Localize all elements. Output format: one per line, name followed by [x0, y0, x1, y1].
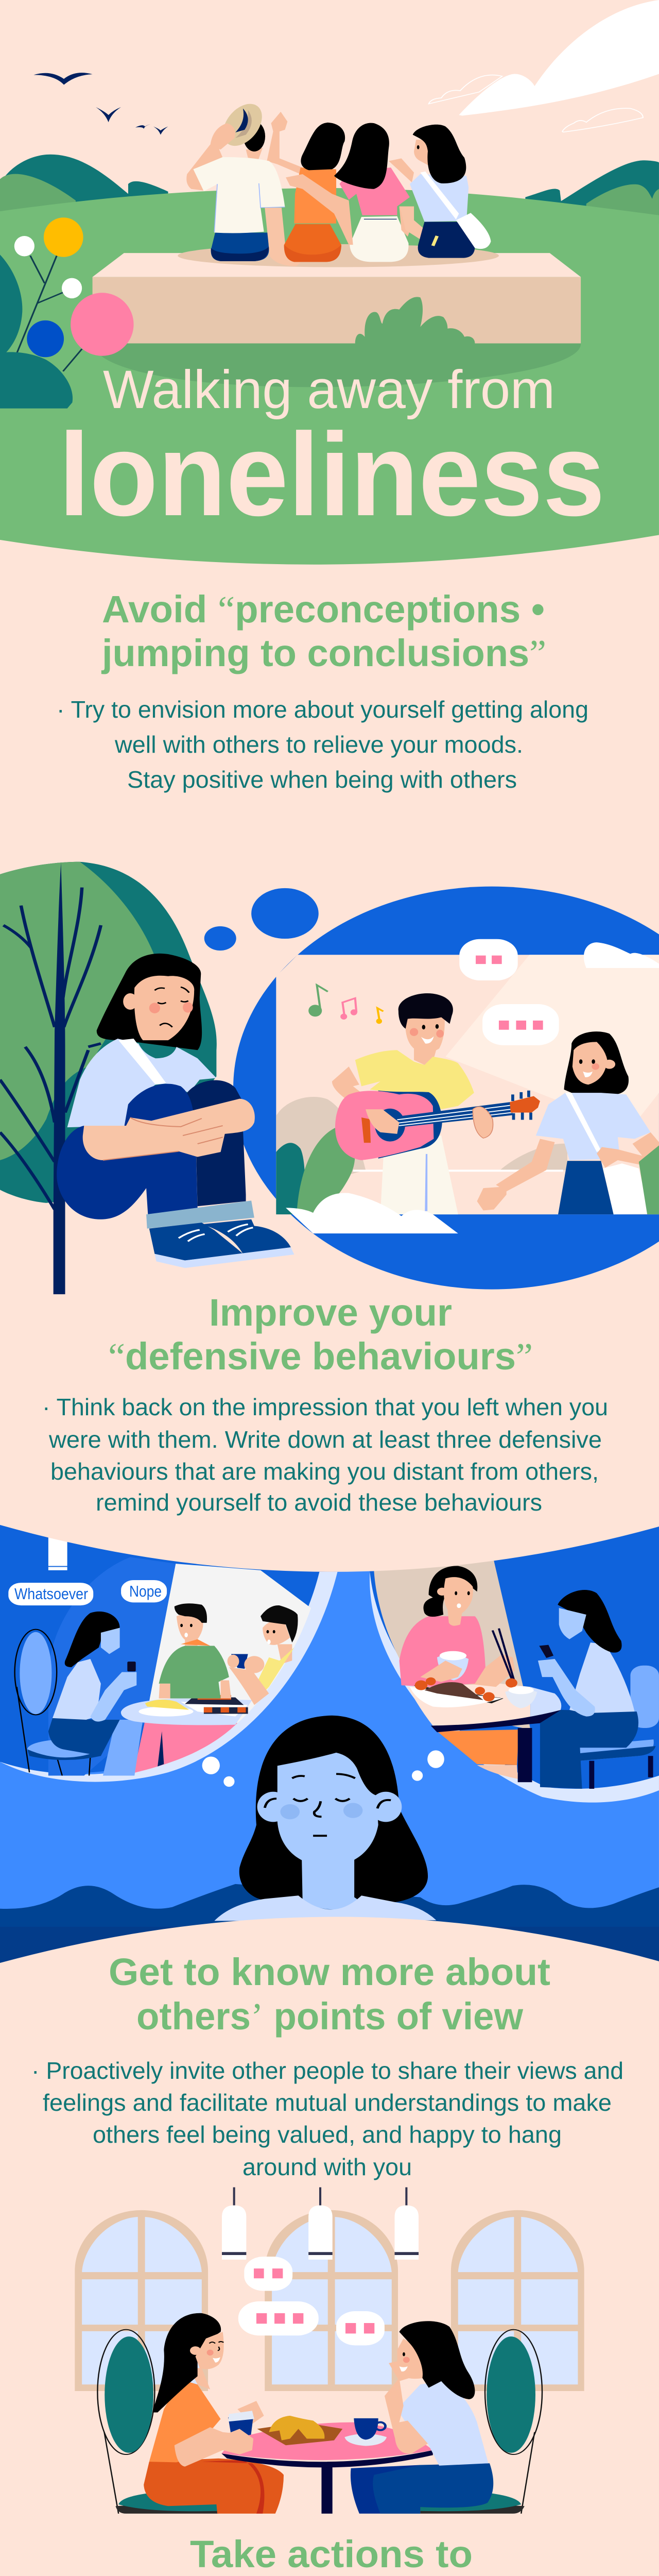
- left woman: [144, 2313, 284, 2514]
- chairs: [97, 2330, 542, 2514]
- people sitting on bench: [186, 99, 491, 266]
- left plant and balloons: [0, 217, 134, 409]
- text block: others' points of view: · Proactively invite other people to share their views and: [31, 2057, 623, 2084]
- left woman's hand: [223, 2429, 253, 2454]
- chair: [15, 1630, 103, 1775]
- speech text: whatsoever: Whatsoever: [14, 1585, 88, 1603]
- heading: avoid preconceptions: [101, 588, 546, 675]
- stone bench: [93, 244, 581, 387]
- panel: lonely girl imagining friends: [0, 862, 659, 1294]
- text block: others' points of view: [31, 2057, 623, 2180]
- cloud: [584, 942, 659, 968]
- big blue circle: [233, 887, 659, 1290]
- guitar scene: [276, 939, 659, 1214]
- tree: [0, 862, 217, 1294]
- window 3: [451, 2210, 584, 2391]
- plate of food: [410, 1677, 537, 1708]
- cloud: [429, 0, 659, 132]
- heading: defensive behaviours: Improve your: [209, 1291, 452, 1334]
- text block: avoid preconceptions: Stay positive when being with others: [127, 766, 517, 793]
- person with bag: [389, 125, 491, 258]
- speech bubbles: [459, 939, 559, 1045]
- girl on phone: [538, 1590, 638, 1789]
- text block: avoid preconceptions: [57, 696, 588, 793]
- text block: defensive behaviours: were with them. Write down at least three defensive: [48, 1426, 602, 1453]
- waves: [0, 1884, 659, 1963]
- speech bubbles: [238, 2257, 385, 2345]
- right woman: [351, 2321, 493, 2514]
- text block: avoid preconceptions: well with others to relieve your moods.: [114, 731, 523, 758]
- two men: [159, 1603, 298, 1705]
- cloud foreground: [286, 1193, 458, 1233]
- panel: hero illustration: [0, 0, 659, 565]
- windows: [75, 2210, 584, 2391]
- icon: birds: [33, 73, 168, 134]
- woman eating: [399, 1566, 517, 1688]
- heading: others' points of view: [109, 1951, 550, 2038]
- icon: thought bubbles: [202, 1750, 444, 1787]
- icon: thought bubbles: [204, 888, 319, 951]
- text block: avoid preconceptions: · Try to envision more about yourself getting along: [57, 696, 588, 723]
- peach curve bottom: [0, 1917, 659, 2006]
- green hill: [0, 188, 659, 565]
- title: Walking away from: [103, 360, 555, 420]
- person with hat: [186, 99, 303, 266]
- speech text: nope: Nope: [129, 1582, 162, 1600]
- text block: defensive behaviours: · Think back on the impression that you left when you: [42, 1394, 608, 1420]
- text block: others' points of view: around with you: [242, 2154, 412, 2180]
- heading: avoid preconceptions: jumping to conclusions”: [101, 632, 546, 675]
- thought bubble: right: [370, 1527, 659, 1803]
- heading: defensive behaviours: “defensive behaviours”: [108, 1335, 533, 1378]
- thought bubble: left: [0, 1525, 337, 1782]
- blue background: [0, 1525, 659, 1963]
- table: [408, 1684, 561, 1782]
- guitarist: [332, 993, 540, 1214]
- table with food: [221, 2416, 433, 2514]
- heading: take actions: Take actions to: [190, 2533, 473, 2575]
- heading: defensive behaviours: [108, 1291, 533, 1378]
- text block: defensive behaviours: behaviours that are making you distant from others,: [50, 1458, 599, 1485]
- icon: music notes: [308, 985, 383, 1024]
- person in pink: [286, 123, 414, 262]
- text block: defensive behaviours: [42, 1394, 608, 1516]
- pendant lamps: [222, 2188, 419, 2260]
- window 2: [265, 2210, 398, 2391]
- text block: defensive behaviours: remind yourself to avoid these behaviours: [96, 1489, 542, 1516]
- background hills: [0, 155, 659, 224]
- table and food: [121, 1695, 252, 1725]
- window 1: [75, 2210, 208, 2391]
- panel: cafe scene: [75, 2188, 584, 2514]
- person in orange: [284, 123, 345, 262]
- heading: others' points of view: Get to know more about: [109, 1951, 550, 1993]
- speech bubbles: [8, 1583, 93, 1605]
- dreaming girl: [214, 1716, 436, 1921]
- title: loneliness: [59, 409, 605, 540]
- heading: avoid preconceptions: Avoid “preconceptions •: [102, 588, 545, 631]
- girl: [477, 1031, 659, 1214]
- panel: daydream scene: [0, 1519, 659, 2006]
- text block: others' points of view: others feel being valued, and happy to hang: [93, 2121, 562, 2148]
- chair: [579, 1666, 659, 1789]
- heading: others' points of view: others’ points of view: [136, 1995, 523, 2038]
- girl on phone: [48, 1612, 143, 1775]
- lonely girl: [57, 954, 294, 1268]
- peach curve top: [0, 1519, 659, 1572]
- text block: others' points of view: feelings and facilitate mutual understandings to make: [43, 2089, 612, 2116]
